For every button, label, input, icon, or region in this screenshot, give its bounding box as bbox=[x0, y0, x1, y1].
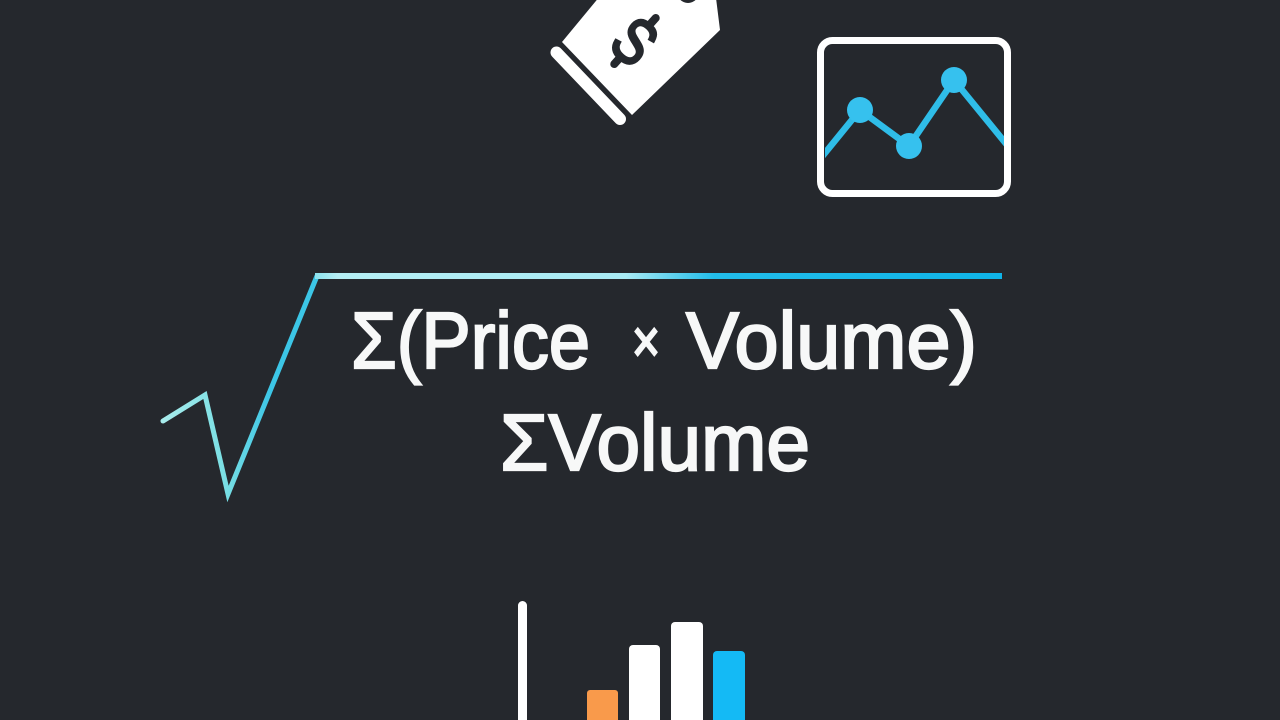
blue bar bbox=[713, 651, 745, 720]
numerator: × bbox=[632, 308, 660, 375]
white bar bbox=[629, 645, 660, 720]
icon: line chart bbox=[818, 40, 1012, 194]
numerator bbox=[351, 296, 977, 385]
axis bbox=[518, 601, 527, 720]
chart frame bbox=[820, 40, 1008, 194]
tall white bar bbox=[671, 622, 703, 720]
chart line bbox=[825, 88, 1004, 158]
dollar sign: S bbox=[597, 4, 671, 80]
chart points bbox=[847, 67, 967, 159]
vinculum bbox=[315, 273, 1002, 279]
orange bar bbox=[587, 690, 618, 720]
tag body bbox=[562, 0, 720, 115]
icon: price tag bbox=[556, 0, 720, 119]
formula text bbox=[351, 296, 977, 487]
tag hole bbox=[677, 0, 699, 3]
numerator: Volume) bbox=[686, 296, 977, 385]
radical stroke bbox=[163, 276, 317, 494]
tag band bbox=[556, 52, 620, 119]
numerator: Σ(Price bbox=[351, 296, 590, 385]
icon: bar chart bbox=[518, 601, 745, 720]
denominator: ΣVolume bbox=[500, 398, 810, 487]
formula: square root bbox=[163, 273, 1002, 494]
